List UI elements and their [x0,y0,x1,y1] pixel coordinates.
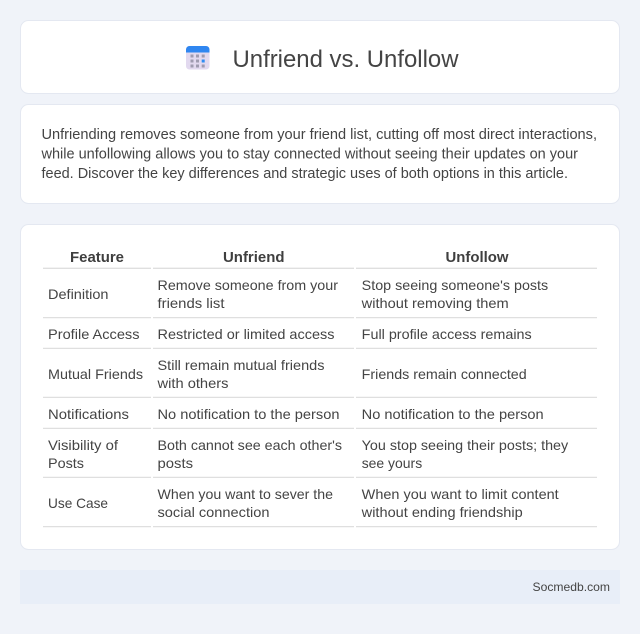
table row: mutual friends: Friends remain connected [362,366,527,382]
table row: profile access: Profile Access [48,326,140,342]
table row: definition: friends list [158,295,225,311]
table header row: Feature [70,249,124,266]
table row: visibility of posts: You stop seeing their posts; they [362,437,568,453]
table row: notifications: No notification to the person [158,406,340,422]
table row: notifications: No notification to the person [362,406,544,422]
table row: mutual friends: with others [156,375,228,391]
table header row: Unfollow [446,249,509,266]
table header row [43,249,597,268]
panel: introduction [20,104,620,204]
table row: definition: Definition [48,286,108,302]
table row: definition: Stop seeing someone's posts [362,277,548,293]
title: Unfriend vs. Unfollow [232,46,459,73]
table row: definition: Remove someone from your [158,277,338,293]
text block: introduction: Unfriending removes someone from your friend list, cutting off most direct interactions, [42,127,597,143]
table row: profile access: Restricted or limited access [158,326,334,342]
icon: calendar [186,46,210,70]
table row: visibility of posts: Visibility of [48,437,118,453]
table row: visibility of posts: Both cannot see each other's [158,437,342,453]
table row: mutual friends: Mutual Friends [48,366,143,382]
table row: use case: without ending friendship [361,504,523,520]
text block: introduction: feed. Discover the key differences and strategic uses of both options in this article. [42,166,568,182]
table row: profile access: Full profile access remains [362,326,532,342]
table row: definition: without removing them [361,295,509,311]
table row: profile access [43,326,597,348]
table row: use case: social connection [158,504,270,520]
table row: visibility of posts: posts [158,455,193,471]
panel: comparison table [20,224,620,550]
table row: visibility of posts: Posts [48,455,84,471]
table row: notifications [43,406,597,428]
table row: visibility of posts [43,437,597,477]
text block: introduction: while unfollowing allows you to stay connected without seeing their updates on your [40,146,578,162]
panel: title card [20,20,620,94]
text block: introduction [40,127,597,182]
table row: use case: When you want to limit content [362,486,559,502]
footer source text: Socmedb.com [532,580,610,594]
table row: definition [43,277,597,318]
table row: use case: When you want to sever the [158,486,333,502]
table header row: Unfriend [223,249,284,266]
table row: use case: Use Case [48,495,108,511]
table row: mutual friends [43,357,597,397]
table row: mutual friends: Still remain mutual friends [158,357,324,373]
table row: visibility of posts: see yours [362,455,422,471]
table row: notifications: Notifications [48,406,129,422]
footer bar [20,570,620,604]
table row: use case [43,486,597,527]
